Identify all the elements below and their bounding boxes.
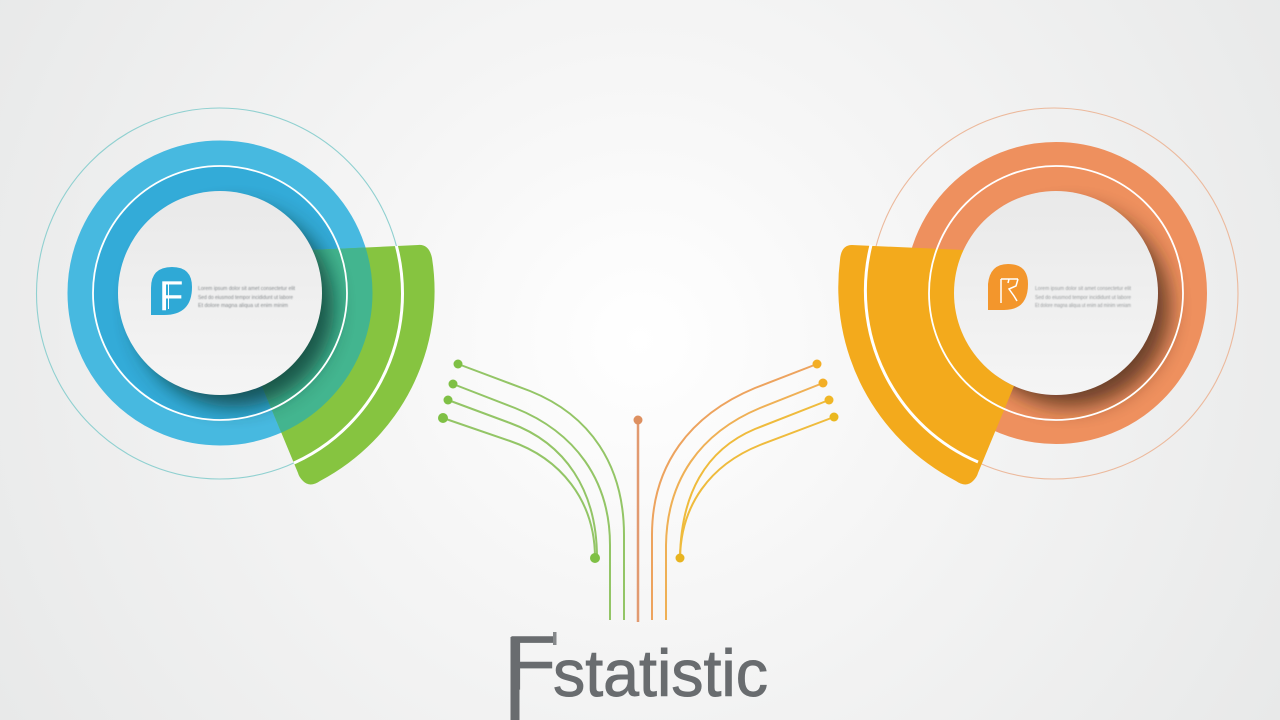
icon letter F: F [159, 272, 183, 319]
text block right: Lorem ipsum dolor sit amet consectetur elit [1035, 286, 1131, 292]
blue inner band [106, 178, 334, 408]
text block right: Sed do eiusmod tempor incididunt ut labore [1035, 295, 1131, 301]
orange connector lines [652, 360, 838, 620]
thin outer ring right [870, 108, 1238, 479]
orange ring [930, 167, 1182, 419]
white disc right [954, 191, 1158, 395]
panel: right orange circle [838, 108, 1238, 484]
text block right: Et dolore magna aliqua ut enim ad minim veniam [1035, 303, 1131, 309]
white disc left [118, 191, 322, 395]
icon: orange badge [988, 264, 1028, 310]
green connector lines [438, 360, 624, 620]
icon second stem [168, 284, 170, 309]
white segment of outer ring on wedge [293, 246, 404, 464]
text block left: Sed do eiusmod tempor incididunt ut labore [198, 295, 293, 301]
disc shadow right [970, 207, 1170, 407]
white segment of outer ring on wedge [865, 245, 978, 462]
title letter F: F [505, 621, 556, 705]
title [505, 621, 768, 720]
text block left: Lorem ipsum dolor sit amet consectetur elit [198, 286, 295, 292]
amber wedge [838, 245, 1014, 484]
blue ring [93, 166, 347, 420]
icon: blue F badge [151, 267, 192, 319]
text block left [198, 286, 295, 309]
white inner ring left [93, 166, 347, 420]
disc shadow left [134, 207, 334, 407]
text block left: Et dolore magna aliqua ut enim minim [198, 303, 288, 309]
thin outer ring left [36, 108, 402, 479]
white inner ring right [929, 166, 1183, 420]
title F end tick [553, 632, 556, 645]
text block right [1035, 286, 1131, 309]
green wedge [262, 245, 435, 484]
title word: statistic [553, 636, 768, 710]
title F extended stem [510, 637, 520, 720]
panel: left blue circle [36, 108, 435, 484]
center connector line [634, 416, 642, 622]
icon glyph [1001, 279, 1018, 303]
teal overlap of ring and wedge [262, 248, 372, 433]
